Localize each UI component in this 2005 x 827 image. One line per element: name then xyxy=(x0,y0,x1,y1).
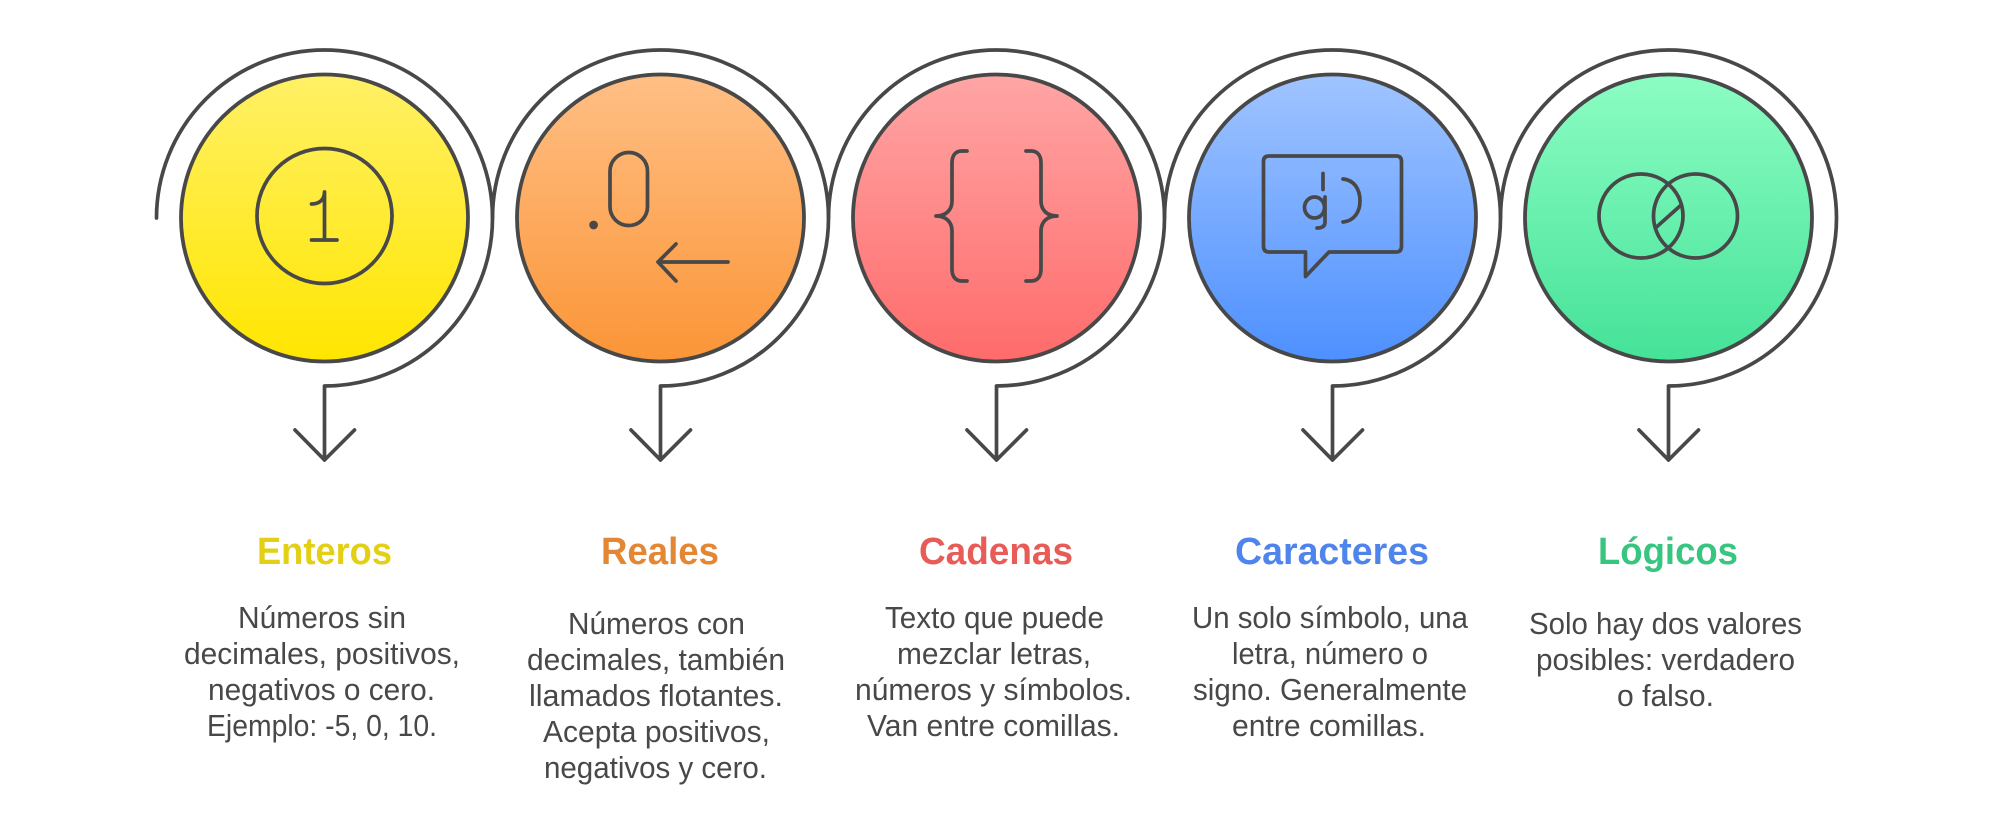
panel: Reales xyxy=(492,50,828,785)
text: Reales description: decimales, también xyxy=(527,643,785,677)
arrow: spiral arc Cadenas xyxy=(828,50,1164,460)
heading: Enteros: Enteros xyxy=(257,531,392,573)
text: Reales description: Acepta positivos, xyxy=(543,715,770,749)
arrow: spiral arc Caracteres xyxy=(1164,50,1500,460)
text: Reales description: negativos y cero. xyxy=(544,751,767,785)
circle: Cadenas xyxy=(853,74,1140,362)
text: Cadenas description: números y símbolos. xyxy=(855,673,1132,707)
text: Cadenas description: Texto que puede xyxy=(885,601,1104,635)
text: Reales description xyxy=(527,607,785,785)
arrow: spiral arc Lógicos xyxy=(1500,50,1837,460)
circle: Lógicos xyxy=(1525,74,1812,362)
text: Enteros description: decimales, positivos, xyxy=(184,637,460,671)
circle: Enteros xyxy=(181,74,468,362)
text: Lógicos description: Solo hay dos valores xyxy=(1529,607,1802,641)
panel: Enteros xyxy=(156,50,492,743)
text: Reales description: llamados flotantes. xyxy=(529,679,783,713)
panel: Caracteres xyxy=(1164,50,1500,743)
arrow: spiral arc Reales xyxy=(492,50,828,460)
icon: number one in circle xyxy=(257,148,392,284)
arrow: spiral arc Enteros xyxy=(156,50,492,460)
text: Cadenas description: Van entre comillas. xyxy=(867,709,1120,743)
icon: decimal point and zero with arrow xyxy=(591,152,728,281)
heading: Reales: Reales xyxy=(601,531,719,573)
icon: curly braces xyxy=(936,151,1057,281)
text: Caracteres description: entre comillas. xyxy=(1232,709,1426,743)
text: Lógicos description: o falso. xyxy=(1617,679,1714,713)
heading: Cadenas: Cadenas xyxy=(919,531,1073,573)
icon: overlapping circles xyxy=(1599,174,1738,258)
text: Reales description: Números con xyxy=(568,607,745,641)
text: Enteros description: Ejemplo: -5, 0, 10. xyxy=(207,709,437,743)
text: Lógicos description: posibles: verdadero xyxy=(1536,643,1795,677)
panel: Cadenas xyxy=(828,50,1164,743)
circle: Caracteres xyxy=(1189,74,1476,362)
text: Enteros description xyxy=(184,601,460,743)
text: Caracteres description xyxy=(1192,601,1468,743)
panel: Lógicos xyxy=(1500,50,1837,713)
text: Enteros description: negativos o cero. xyxy=(208,673,435,707)
text: Caracteres description: Un solo símbolo, una xyxy=(1192,601,1468,635)
text: Caracteres description: letra, número o xyxy=(1232,637,1428,671)
text: Cadenas description: mezclar letras, xyxy=(897,637,1091,671)
text: Cadenas description xyxy=(855,601,1132,743)
text: Enteros description: Números sin xyxy=(238,601,406,635)
icon: speech bubble with glyphs xyxy=(1264,156,1402,276)
text: Lógicos description xyxy=(1529,607,1802,713)
text: Caracteres description: signo. Generalmente xyxy=(1193,673,1467,707)
heading: Lógicos: Lógicos xyxy=(1598,531,1738,573)
circle: Reales xyxy=(517,74,804,362)
heading: Caracteres: Caracteres xyxy=(1235,531,1429,573)
